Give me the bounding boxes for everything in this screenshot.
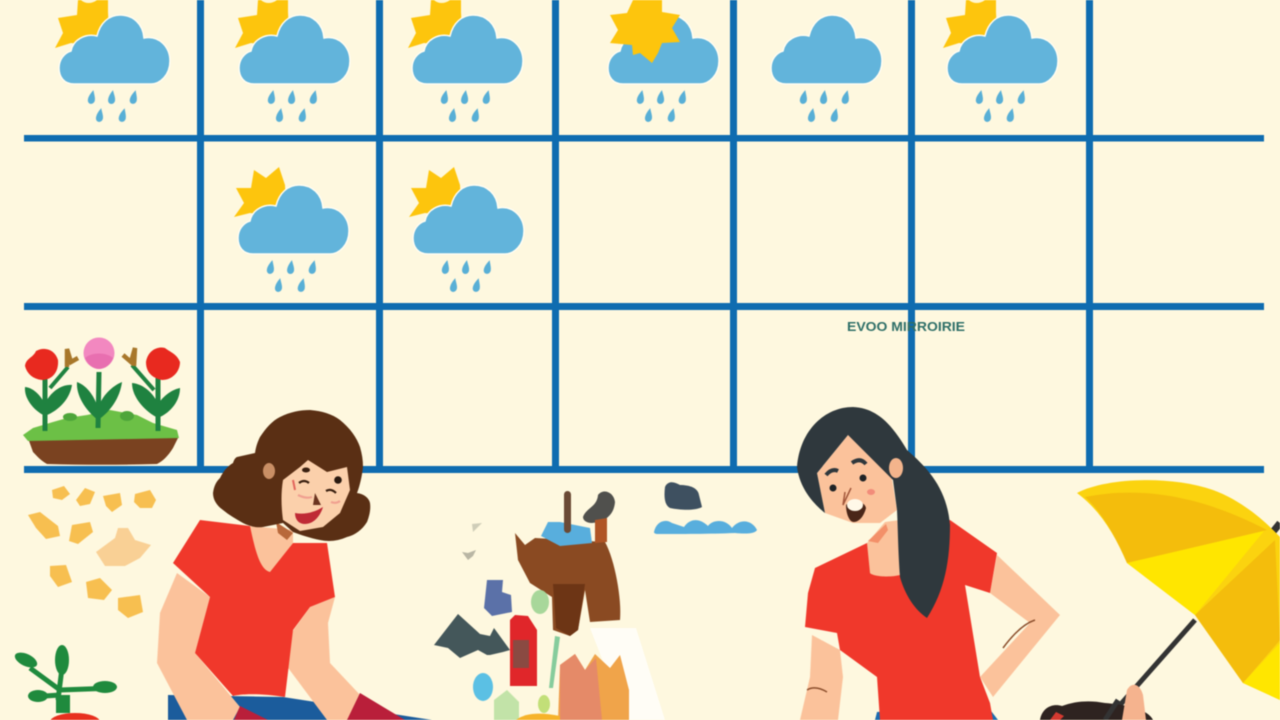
neck	[867, 520, 900, 576]
icon: rain cloud with sun, row 1 column 6	[943, 0, 1058, 123]
icon: tulip planter	[23, 338, 180, 465]
yellow umbrella	[1077, 480, 1280, 720]
green shape	[531, 590, 549, 614]
tulip heads	[25, 349, 58, 380]
jeans	[168, 695, 432, 720]
icon: rain cloud with sun, row 1 column 1	[55, 0, 170, 123]
icon: rain cloud with sun, row 1 column 2	[235, 0, 350, 123]
grass	[23, 410, 179, 441]
falling yellow petals	[28, 486, 156, 618]
arms	[800, 635, 843, 720]
neck	[250, 526, 293, 572]
arms	[157, 573, 240, 720]
bottle blue	[484, 580, 512, 616]
icon: rain cloud with sun in front, row 1 column 4	[608, 0, 719, 123]
canopy rim	[1077, 480, 1280, 700]
plant seedling with tomato	[13, 645, 117, 720]
white cloth	[590, 628, 665, 720]
small scraps	[472, 523, 482, 532]
distant dark cloud and blue cloud	[654, 482, 757, 534]
ear	[889, 458, 903, 478]
dark leaf shape	[434, 614, 510, 658]
umbrella shaft	[1105, 620, 1195, 720]
red bottle	[510, 615, 537, 686]
child at bottom right with hand on umbrella	[1040, 685, 1153, 720]
orange bottles	[558, 654, 629, 720]
red shirt	[173, 520, 335, 697]
icon: rain cloud, row 1 column 5	[771, 15, 882, 123]
long black hair	[797, 407, 950, 618]
gloves	[234, 706, 268, 720]
pot	[28, 438, 178, 465]
pile of garden clutter	[434, 491, 665, 720]
blue cloth	[541, 522, 592, 546]
blue egg	[473, 673, 493, 701]
brown sack	[515, 533, 620, 636]
icon: rain cloud with sun, row 2 column 2	[234, 167, 349, 293]
leaves	[25, 385, 72, 416]
face	[817, 435, 897, 523]
icon: rain cloud with sun, row 2 column 3	[409, 167, 524, 293]
woman with long black hair	[797, 407, 1060, 720]
calendar grid	[24, 0, 1264, 473]
icon: rain cloud with sun, row 1 column 3	[408, 0, 523, 123]
face	[282, 460, 350, 531]
woman with curly brown hair	[157, 410, 432, 720]
facial features	[826, 460, 866, 475]
red shirt	[805, 520, 997, 720]
hair	[213, 410, 370, 541]
pale bottle and sprout	[494, 690, 519, 720]
side buds	[50, 365, 154, 390]
stems	[45, 372, 158, 431]
handle and dark boot	[564, 491, 571, 533]
mouth and eyes	[295, 507, 323, 524]
garbled cell label: EVOO MIRROIRIE	[847, 319, 965, 334]
jeans	[875, 703, 998, 720]
